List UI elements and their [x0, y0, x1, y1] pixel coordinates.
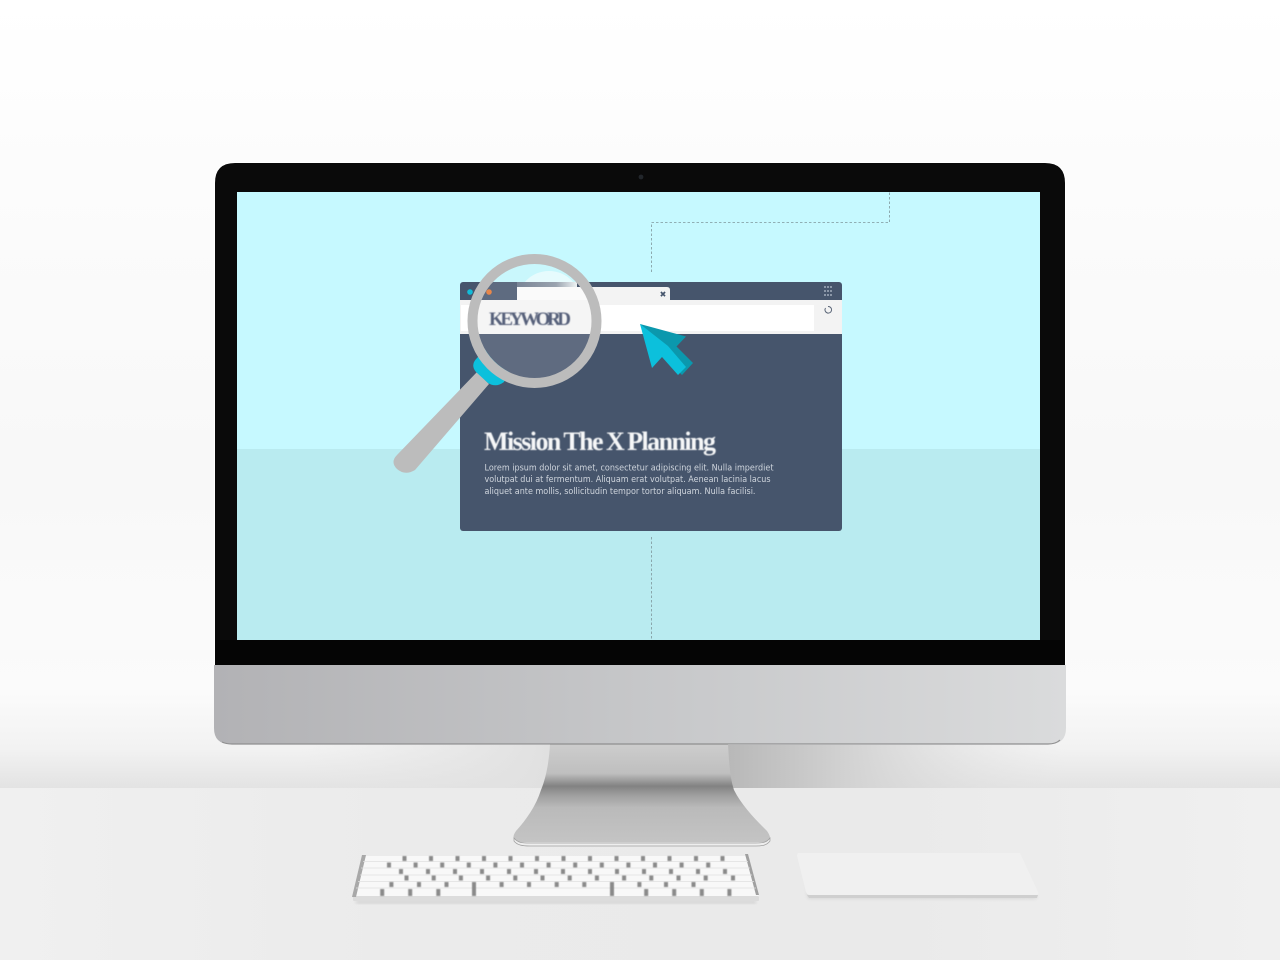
body text — [484, 464, 774, 497]
stand shadow on wall left — [300, 745, 550, 788]
row 2 — [387, 862, 710, 868]
chin bottom edge — [222, 740, 1060, 744]
body text: aliquet ante mollis, sollicitudin tempor tortor aliquam. Nulla facilisi. — [484, 487, 756, 497]
lens titlebar — [482, 282, 517, 300]
keyboard left side — [352, 855, 366, 897]
stand shadow on wall right — [728, 745, 1068, 788]
trackpad front edge — [807, 895, 1038, 898]
row 4 — [404, 876, 735, 880]
magnifier ring — [472, 259, 596, 383]
monitor stand — [514, 744, 770, 846]
grid menu icon — [824, 286, 832, 296]
lens highlight — [525, 271, 573, 282]
keyboard body — [353, 856, 759, 897]
heading: Mission The X Planning — [484, 427, 716, 456]
monitor lower bezel — [215, 640, 1065, 665]
lens contents — [478, 271, 592, 378]
browser window — [460, 282, 842, 531]
keyboard right side — [745, 854, 759, 895]
screen upper background — [237, 192, 1040, 449]
address strip — [460, 300, 842, 334]
row 6 — [380, 882, 731, 896]
webcam — [639, 175, 643, 179]
screen — [237, 192, 1040, 640]
row 3 — [399, 869, 727, 874]
keyboard front edge — [353, 896, 759, 901]
magnifier collar — [473, 345, 520, 385]
active tab — [517, 287, 670, 300]
icon: magnifying glass — [394, 255, 600, 473]
trackpad shadow — [797, 856, 1038, 899]
reload icon — [825, 306, 832, 313]
dashed connector top — [652, 192, 890, 272]
keyboard — [352, 854, 759, 904]
monitor chin — [214, 665, 1066, 744]
lens tab — [517, 287, 581, 300]
body text: volutpat dui at fermentum. Aliquam erat volutpat. Aenean lacinia lacus — [484, 475, 771, 485]
keyword text: KEYWORD — [489, 309, 571, 330]
cursor front side — [640, 324, 686, 375]
dashed connector bottom — [650, 537, 652, 640]
body text: Lorem ipsum dolor sit amet, consectetur adipiscing elit. Nulla imperdiet — [484, 464, 774, 474]
magnifier handle — [394, 372, 489, 473]
monitor outline highlight — [214, 162, 1066, 666]
icon: cursor arrow — [640, 324, 693, 375]
stand base edge — [514, 838, 770, 846]
cursor shadow side — [640, 324, 693, 375]
desk surface — [0, 788, 1280, 960]
key gaps — [380, 856, 735, 896]
tab close icon: ✖ — [660, 290, 667, 299]
lens sky tint — [492, 282, 576, 283]
key row lines — [356, 862, 756, 888]
keyboard shadow — [356, 900, 756, 904]
monitor — [214, 162, 1066, 744]
lens orange dot — [486, 289, 492, 295]
stand neck — [514, 744, 770, 842]
monitor bezel — [215, 163, 1065, 666]
address input — [461, 305, 814, 331]
trackpad — [797, 853, 1038, 899]
trackpad top — [797, 853, 1038, 895]
window dot blue — [467, 289, 473, 295]
lens dark area — [479, 334, 590, 378]
browser body — [460, 282, 842, 531]
row 5 — [389, 882, 696, 887]
lens address strip — [478, 300, 592, 334]
row 1 — [402, 856, 724, 861]
screen lower background — [237, 449, 1040, 640]
lens titlebar right shade — [517, 282, 577, 287]
